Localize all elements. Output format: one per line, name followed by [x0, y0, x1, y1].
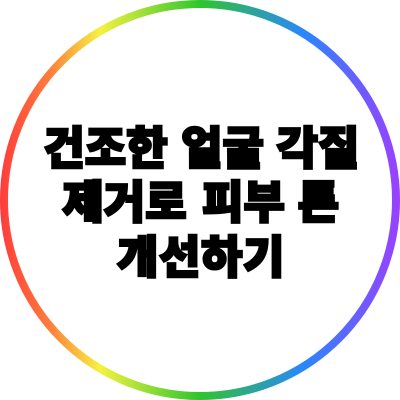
title line 1: 얼굴	[181, 123, 264, 174]
title line 1: 건조한	[43, 123, 168, 174]
title line 2: 피부	[202, 177, 285, 228]
title line 2: 톤	[298, 177, 339, 228]
title line 1: 각질	[277, 123, 359, 174]
title line 3: 개선하기	[117, 232, 285, 283]
title line 2	[62, 177, 339, 228]
title	[43, 123, 359, 283]
title line 1	[43, 123, 359, 174]
title line 2: 제거로	[62, 177, 187, 228]
